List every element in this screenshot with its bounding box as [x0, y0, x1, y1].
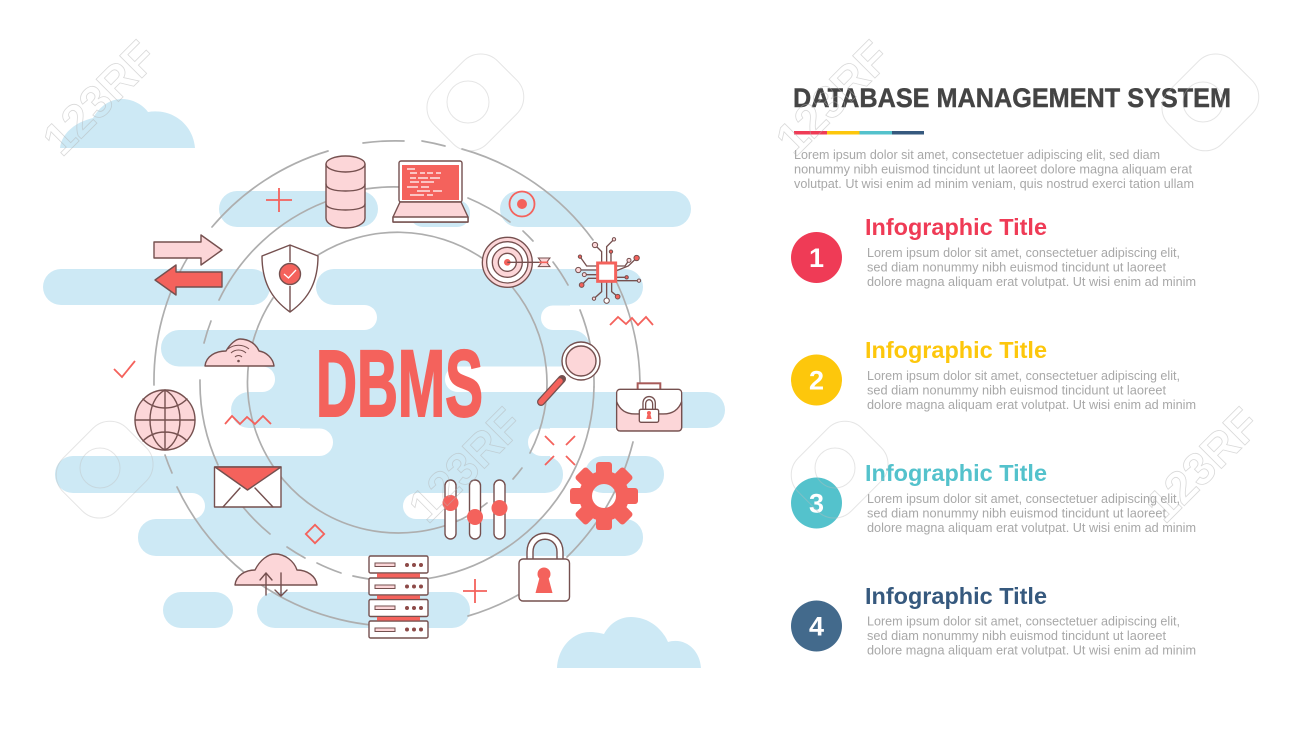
item 4	[791, 583, 1196, 658]
item 4: dolore magna aliquam erat volutpat. Ut wisi enim ad minim	[867, 644, 1196, 658]
decoration: plus upper	[266, 188, 292, 212]
item 1: sed diam nonummy nibh euismod tincidunt ut laoreet	[867, 260, 1167, 274]
item 1: 1	[809, 243, 824, 273]
item 3	[791, 460, 1196, 535]
item 4: Lorem ipsum dolor sit amet, consectetuer adipiscing elit,	[867, 614, 1180, 628]
watermark overlay: 123RF	[32, 31, 167, 165]
decoration: zigzag right	[610, 317, 653, 325]
concentric dashed rings	[154, 141, 640, 626]
item 4: sed diam nonummy nibh euismod tincidunt ut laoreet	[867, 629, 1167, 643]
decoration: burst marks	[545, 436, 575, 465]
intro paragraph: volutpat. Ut wisi enim ad minim veniam, quis nostrud exerci tation ullam	[794, 177, 1194, 191]
icon: padlock	[519, 533, 570, 601]
intro paragraph	[794, 148, 1194, 191]
item 2: dolore magna aliquam erat volutpat. Ut wisi enim ad minim	[867, 398, 1196, 412]
item 1: Lorem ipsum dolor sit amet, consectetuer adipiscing elit,	[867, 246, 1180, 260]
icon: cloud with up and down arrows	[235, 554, 317, 596]
item 4: Infographic Title	[865, 583, 1047, 609]
item 2	[791, 337, 1196, 412]
intro paragraph: nonummy nibh euismod tincidunt ut laoreet dolore magna aliquam erat	[794, 162, 1193, 176]
item 3: sed diam nonummy nibh euismod tincidunt ut laoreet	[867, 506, 1167, 520]
heading: DBMS: DBMS	[316, 331, 483, 437]
background: blue cloud and pill shapes	[43, 99, 725, 668]
item 3: Lorem ipsum dolor sit amet, consectetuer adipiscing elit,	[867, 492, 1180, 506]
decoration: plus lower	[463, 579, 487, 603]
icon: database	[326, 156, 365, 228]
icon: gear	[570, 462, 638, 530]
watermark overlay	[32, 31, 1270, 532]
watermark overlay: 123RF	[398, 398, 533, 532]
icon: target with arrow	[482, 237, 550, 287]
decoration: check mark	[114, 361, 135, 377]
item 3: dolore magna aliquam erat volutpat. Ut wisi enim ad minim	[867, 521, 1196, 535]
icon: briefcase with padlock	[617, 383, 682, 431]
decoration: diamond	[306, 525, 324, 543]
icon: shield with check	[262, 245, 318, 312]
icon: magnifier	[541, 342, 600, 402]
item 1: dolore magna aliquam erat volutpat. Ut wisi enim ad minim	[867, 275, 1196, 289]
item 3: Infographic Title	[865, 460, 1047, 486]
icon: laptop with code	[393, 161, 468, 222]
heading: database management system: DATABASE MANAGEMENT SYSTEM	[793, 83, 1231, 113]
heading: database management system	[793, 83, 1231, 134]
icon: exchange arrows	[154, 235, 222, 295]
icon: cloud with wifi	[205, 339, 274, 366]
intro paragraph: Lorem ipsum dolor sit amet, consectetuer adipiscing elit, sed diam	[794, 148, 1160, 162]
icon: chip circuit	[576, 238, 641, 303]
item 3: 3	[809, 488, 824, 518]
item 2: Infographic Title	[865, 337, 1047, 363]
item 2: sed diam nonummy nibh euismod tincidunt ut laoreet	[867, 384, 1167, 398]
item 2: 2	[809, 366, 824, 396]
icon: server rack	[369, 556, 428, 638]
watermark overlay: 123RF	[765, 31, 900, 165]
watermark overlay: 123RF	[1135, 398, 1270, 532]
icon: globe	[135, 390, 195, 450]
icon: sliders	[442, 480, 508, 539]
icon: envelope	[214, 467, 281, 507]
decoration: zigzag left	[225, 416, 271, 424]
item 4: 4	[809, 612, 824, 642]
item 2: Lorem ipsum dolor sit amet, consectetuer adipiscing elit,	[867, 369, 1180, 383]
item 1: Infographic Title	[865, 214, 1047, 240]
decoration: ring dot	[510, 192, 534, 216]
item 1	[791, 214, 1196, 289]
